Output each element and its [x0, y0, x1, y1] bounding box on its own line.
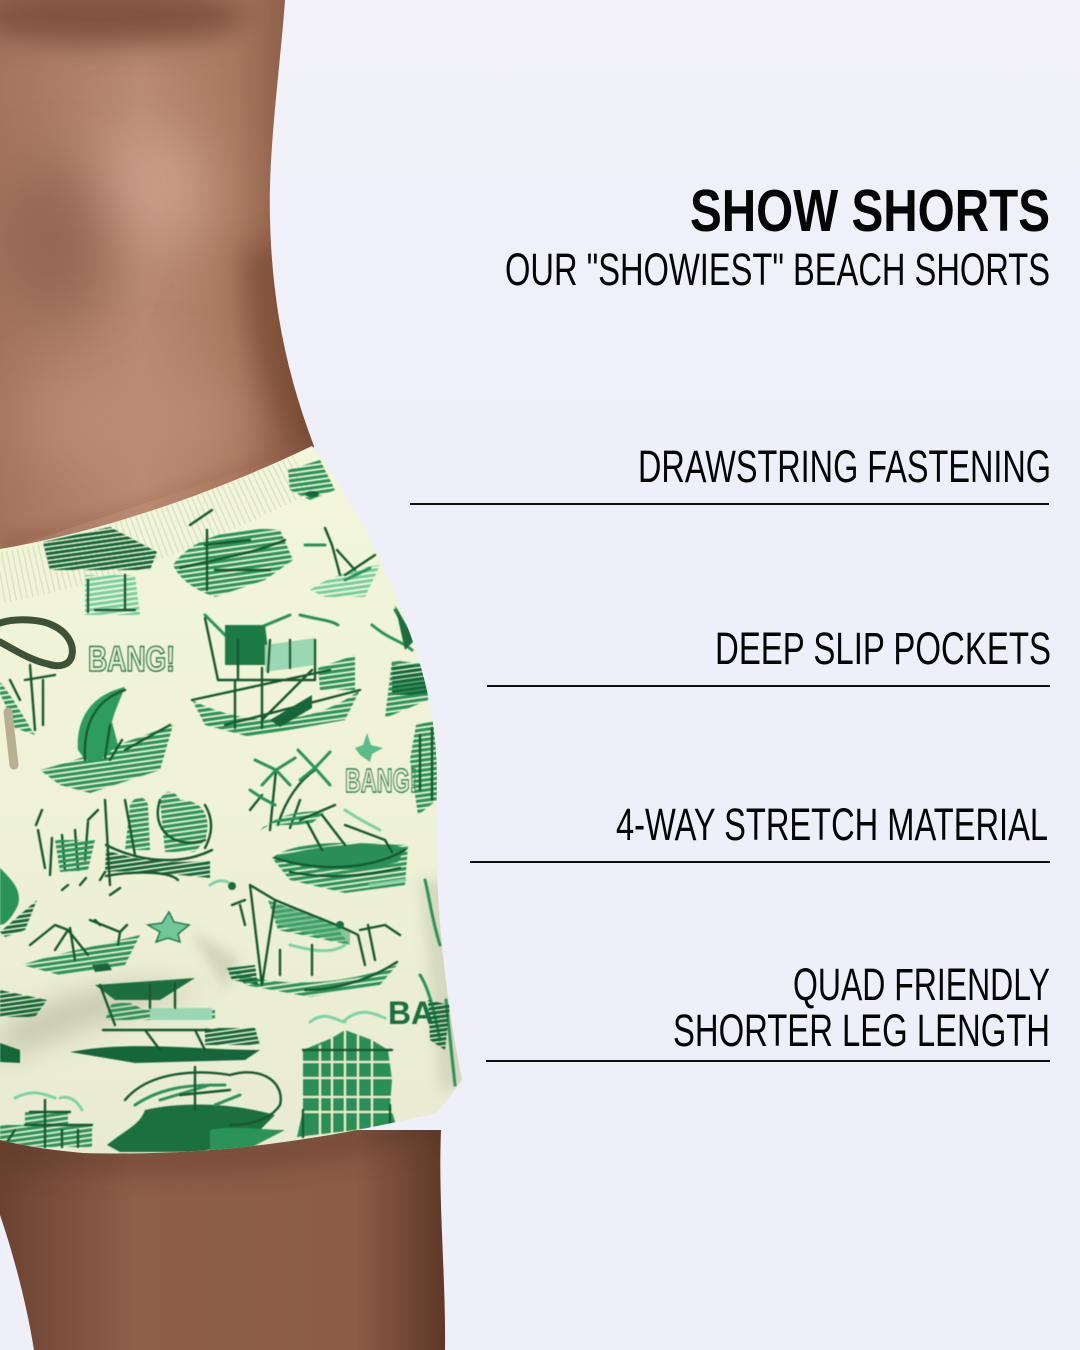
- cord tips: [8, 712, 14, 765]
- motif: star 1: [355, 733, 383, 762]
- motif: left building: [0, 1093, 92, 1147]
- fabric folds: [0, 984, 210, 1060]
- motif: boat top: [173, 510, 293, 597]
- brand lettering: BANG 1: BANG!: [88, 640, 175, 679]
- motif: right side scene: [372, 605, 432, 718]
- motif: star 2: [148, 912, 189, 942]
- motif: dolphin: [40, 687, 173, 793]
- photo: patterned shorts: [0, 446, 470, 1153]
- motif: wave and ship: [107, 1067, 285, 1152]
- motif: art deco building: [297, 1012, 396, 1137]
- motif: palm left: [0, 665, 55, 735]
- motif: motor boat: [272, 805, 408, 893]
- motif: volleyball net: [210, 881, 400, 997]
- motif: lifeguard tower: [192, 615, 360, 737]
- motif: right edge panel: [410, 720, 437, 815]
- waistband ribbing: [0, 470, 300, 578]
- photo: model torso: [0, 0, 330, 570]
- brand lettering: BANG 2: BANG!: [345, 762, 417, 799]
- brand lettering: BANG 3: BA: [388, 995, 434, 1031]
- drawstring: [0, 620, 72, 765]
- motif: dog and player: [22, 920, 140, 975]
- motif: crowd and boat: [36, 792, 212, 895]
- motif: swan left: [0, 868, 37, 937]
- motif: palm trees: [250, 750, 330, 830]
- motif: surfer: [305, 528, 380, 597]
- motif: lifeguard tower lower: [70, 978, 260, 1063]
- title block: [505, 178, 1050, 295]
- motif: right edge tree: [420, 880, 455, 1085]
- motif: building top: [43, 527, 157, 615]
- feature: quad friendly shorter leg length: [486, 959, 1050, 1062]
- motif: left fragments: [0, 990, 47, 1063]
- photo: model thigh: [0, 1108, 445, 1350]
- print: motifs: [0, 460, 455, 1152]
- motif: top pocket scene: [288, 460, 335, 500]
